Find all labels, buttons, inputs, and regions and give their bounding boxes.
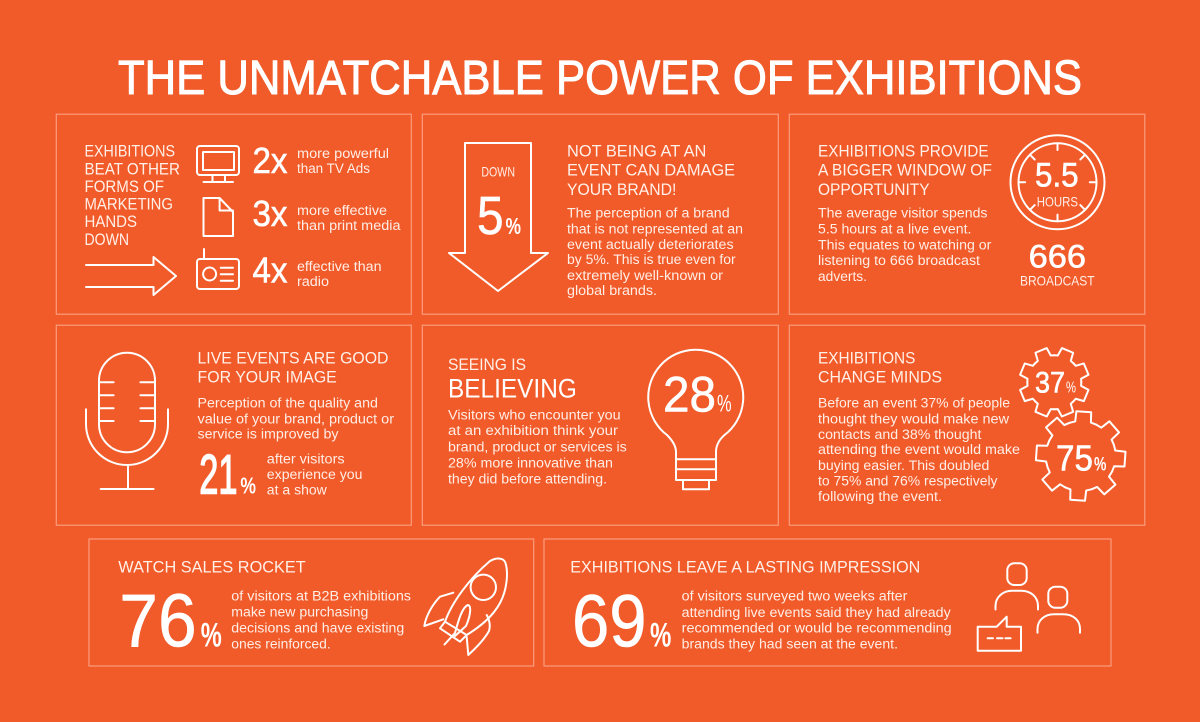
stat: 2x tv <box>252 140 389 181</box>
heading: beat other forms: DOWN <box>84 230 129 249</box>
stat: 3x print: 3x <box>252 193 288 234</box>
body text: 28% more innovative than <box>448 455 613 470</box>
stat: 4x radio: 4x <box>252 250 288 291</box>
icon: down arrow with 5% <box>449 143 548 291</box>
body text: Before an event 37% of people <box>818 395 1010 410</box>
body text: extremely well-known or <box>567 268 724 283</box>
heading: beat other forms: EXHIBITIONS <box>84 142 175 160</box>
icon: gear 75%: % <box>1094 455 1106 476</box>
panel: lasting impression <box>544 539 1111 666</box>
heading: beat other forms: FORMS OF <box>84 177 164 196</box>
icon: rocket <box>424 559 507 655</box>
body text: contacts and 38% thought <box>818 427 982 442</box>
heading: good for your image <box>198 348 388 386</box>
icon: down arrow with 5%: DOWN <box>481 164 515 180</box>
stat caption: after visitors <box>267 451 345 466</box>
heading: bigger window <box>818 142 992 199</box>
body text: global brands. <box>567 283 657 298</box>
body text: value of your brand, product or <box>198 411 395 426</box>
body text: make new purchasing <box>231 605 368 620</box>
body text <box>567 206 743 298</box>
stat caption: experience you <box>267 467 362 482</box>
heading: damage your brand: NOT BEING AT AN <box>567 142 706 161</box>
icon: right arrow <box>86 257 176 295</box>
icon: gear 75% <box>1033 409 1128 503</box>
body text <box>198 395 395 442</box>
body text: recommended or would be recommending <box>682 621 952 636</box>
icon: light bulb 28%: % <box>717 391 732 418</box>
icon: tv <box>197 146 239 182</box>
heading: beat other forms: MARKETING <box>84 194 173 214</box>
heading: damage your brand <box>567 142 735 199</box>
body text: Visitors who encounter you <box>448 408 621 423</box>
stat: 666 broadcast <box>1020 239 1095 288</box>
icon: light bulb 28% <box>648 350 743 489</box>
body text: listening to 666 broadcast <box>818 253 980 268</box>
stat: 4x radio: effective than <box>297 259 382 274</box>
stat: 76%: % <box>201 617 222 655</box>
body text: at an exhibition think your <box>448 423 619 438</box>
heading: good for your image: LIVE EVENTS ARE GOOD <box>198 348 388 367</box>
body text: Perception of the quality and <box>198 395 378 410</box>
body text <box>231 589 411 651</box>
body text <box>818 395 1020 504</box>
icon: radio <box>197 249 239 289</box>
heading: good for your image: FOR YOUR IMAGE <box>198 367 337 386</box>
body text: following the event. <box>818 489 942 504</box>
body text: ones reinforced. <box>231 636 331 651</box>
body text: of visitors surveyed two weeks after <box>682 589 908 604</box>
panel: watch sales rocket <box>89 539 534 666</box>
icon: down arrow with 5%: 5 <box>477 186 504 246</box>
stat: 2x tv: than TV Ads <box>297 161 370 176</box>
body text: buying easier. This doubled <box>818 458 989 473</box>
heading: seeing is believing: BELIEVING <box>448 374 577 404</box>
body text: decisions and have existing <box>231 621 404 636</box>
body text <box>448 408 627 486</box>
panel: exhibitions change minds <box>789 325 1145 525</box>
body text: attending live events said they had already <box>682 605 951 620</box>
body text: by 5%. This is true even for <box>567 252 736 267</box>
heading: beat other forms <box>84 142 180 249</box>
icon: people talking <box>978 563 1080 651</box>
stat: 4x radio <box>252 250 382 291</box>
stat: 3x print: more effective <box>297 203 387 218</box>
heading: beat other forms: HANDS <box>84 212 137 231</box>
panel: exhibitions beat other forms of marketing <box>56 114 411 314</box>
body text <box>818 206 992 284</box>
stat: 3x print: than print media <box>297 218 401 233</box>
stat: 21%: 21 <box>199 442 238 505</box>
body text <box>682 589 952 651</box>
heading: beat other forms: BEAT OTHER <box>84 159 180 178</box>
panel: live events good for your image <box>56 325 411 525</box>
heading: watch sales rocket: WATCH SALES ROCKET <box>118 557 306 576</box>
body text: thought they would make new <box>818 411 1009 426</box>
stat: 666 broadcast: BROADCAST <box>1020 272 1095 288</box>
title: THE UNMATCHABLE POWER OF EXHIBITIONS <box>118 52 1082 105</box>
body text: brands they had seen at the event. <box>682 636 898 651</box>
heading: seeing is believing <box>448 355 577 404</box>
panel: not being at an event <box>422 114 778 314</box>
stat: 69%: % <box>650 617 671 655</box>
body text: that is not represented at an <box>567 221 743 236</box>
icon: down arrow with 5%: % <box>506 213 521 239</box>
panel: seeing is believing <box>422 325 778 525</box>
icon: gear 37% <box>1009 337 1099 427</box>
stat: 4x radio: radio <box>297 274 329 289</box>
body text: This equates to watching or <box>818 237 992 252</box>
stat: 69%: 69 <box>572 580 646 663</box>
body text: service is improved by <box>198 427 339 442</box>
icon: gear 75%: 75 <box>1056 438 1093 479</box>
stat: 21%: % <box>240 472 256 498</box>
body text: brand, product or services is <box>448 439 627 454</box>
heading: bigger window: OPPORTUNITY <box>818 180 930 199</box>
stat: 2x tv: more powerful <box>297 146 389 161</box>
stat: 76%: 76 <box>119 579 197 663</box>
heading: change minds <box>818 348 942 387</box>
panel: bigger window of opportunity <box>789 114 1145 314</box>
body text: adverts. <box>818 269 867 284</box>
stat caption: at a show <box>267 483 327 498</box>
stat: 2x tv: 2x <box>252 140 288 181</box>
body text: they did before attending. <box>448 471 607 486</box>
stat: 3x print <box>252 193 401 234</box>
stat caption <box>267 451 362 498</box>
body text: event actually deteriorates <box>567 237 734 252</box>
icon: document <box>204 198 233 236</box>
icon: light bulb 28%: 28 <box>663 367 716 423</box>
icon: clock 5.5 hours <box>1010 135 1104 229</box>
heading: change minds: CHANGE MINDS <box>818 368 942 387</box>
icon: clock 5.5 hours: HOURS <box>1037 194 1078 210</box>
body text: The average visitor spends <box>818 206 988 221</box>
heading: damage your brand: YOUR BRAND! <box>567 180 676 199</box>
heading: damage your brand: EVENT CAN DAMAGE <box>567 160 735 180</box>
heading: lasting impression: EXHIBITIONS LEAVE A LASTING IMPRESSION <box>570 557 920 576</box>
body text: to 75% and 76% respectively <box>818 474 998 489</box>
heading: bigger window: A BIGGER WINDOW OF <box>818 161 992 180</box>
heading: change minds: EXHIBITIONS <box>818 348 915 367</box>
body text: of visitors at B2B exhibitions <box>231 589 411 604</box>
icon: clock 5.5 hours: 5.5 <box>1035 157 1079 195</box>
heading: bigger window: EXHIBITIONS PROVIDE <box>818 142 989 161</box>
icon: gear 37%: 37 <box>1035 366 1065 400</box>
icon: gear 37%: % <box>1066 380 1076 396</box>
body text: 5.5 hours at a live event. <box>818 221 971 236</box>
stat: 666 broadcast: 666 <box>1029 239 1086 275</box>
body text: attending the event would make <box>818 442 1020 457</box>
icon: microphone <box>86 353 168 489</box>
body text: The perception of a brand <box>567 206 730 221</box>
heading: seeing is believing: SEEING IS <box>448 355 526 374</box>
